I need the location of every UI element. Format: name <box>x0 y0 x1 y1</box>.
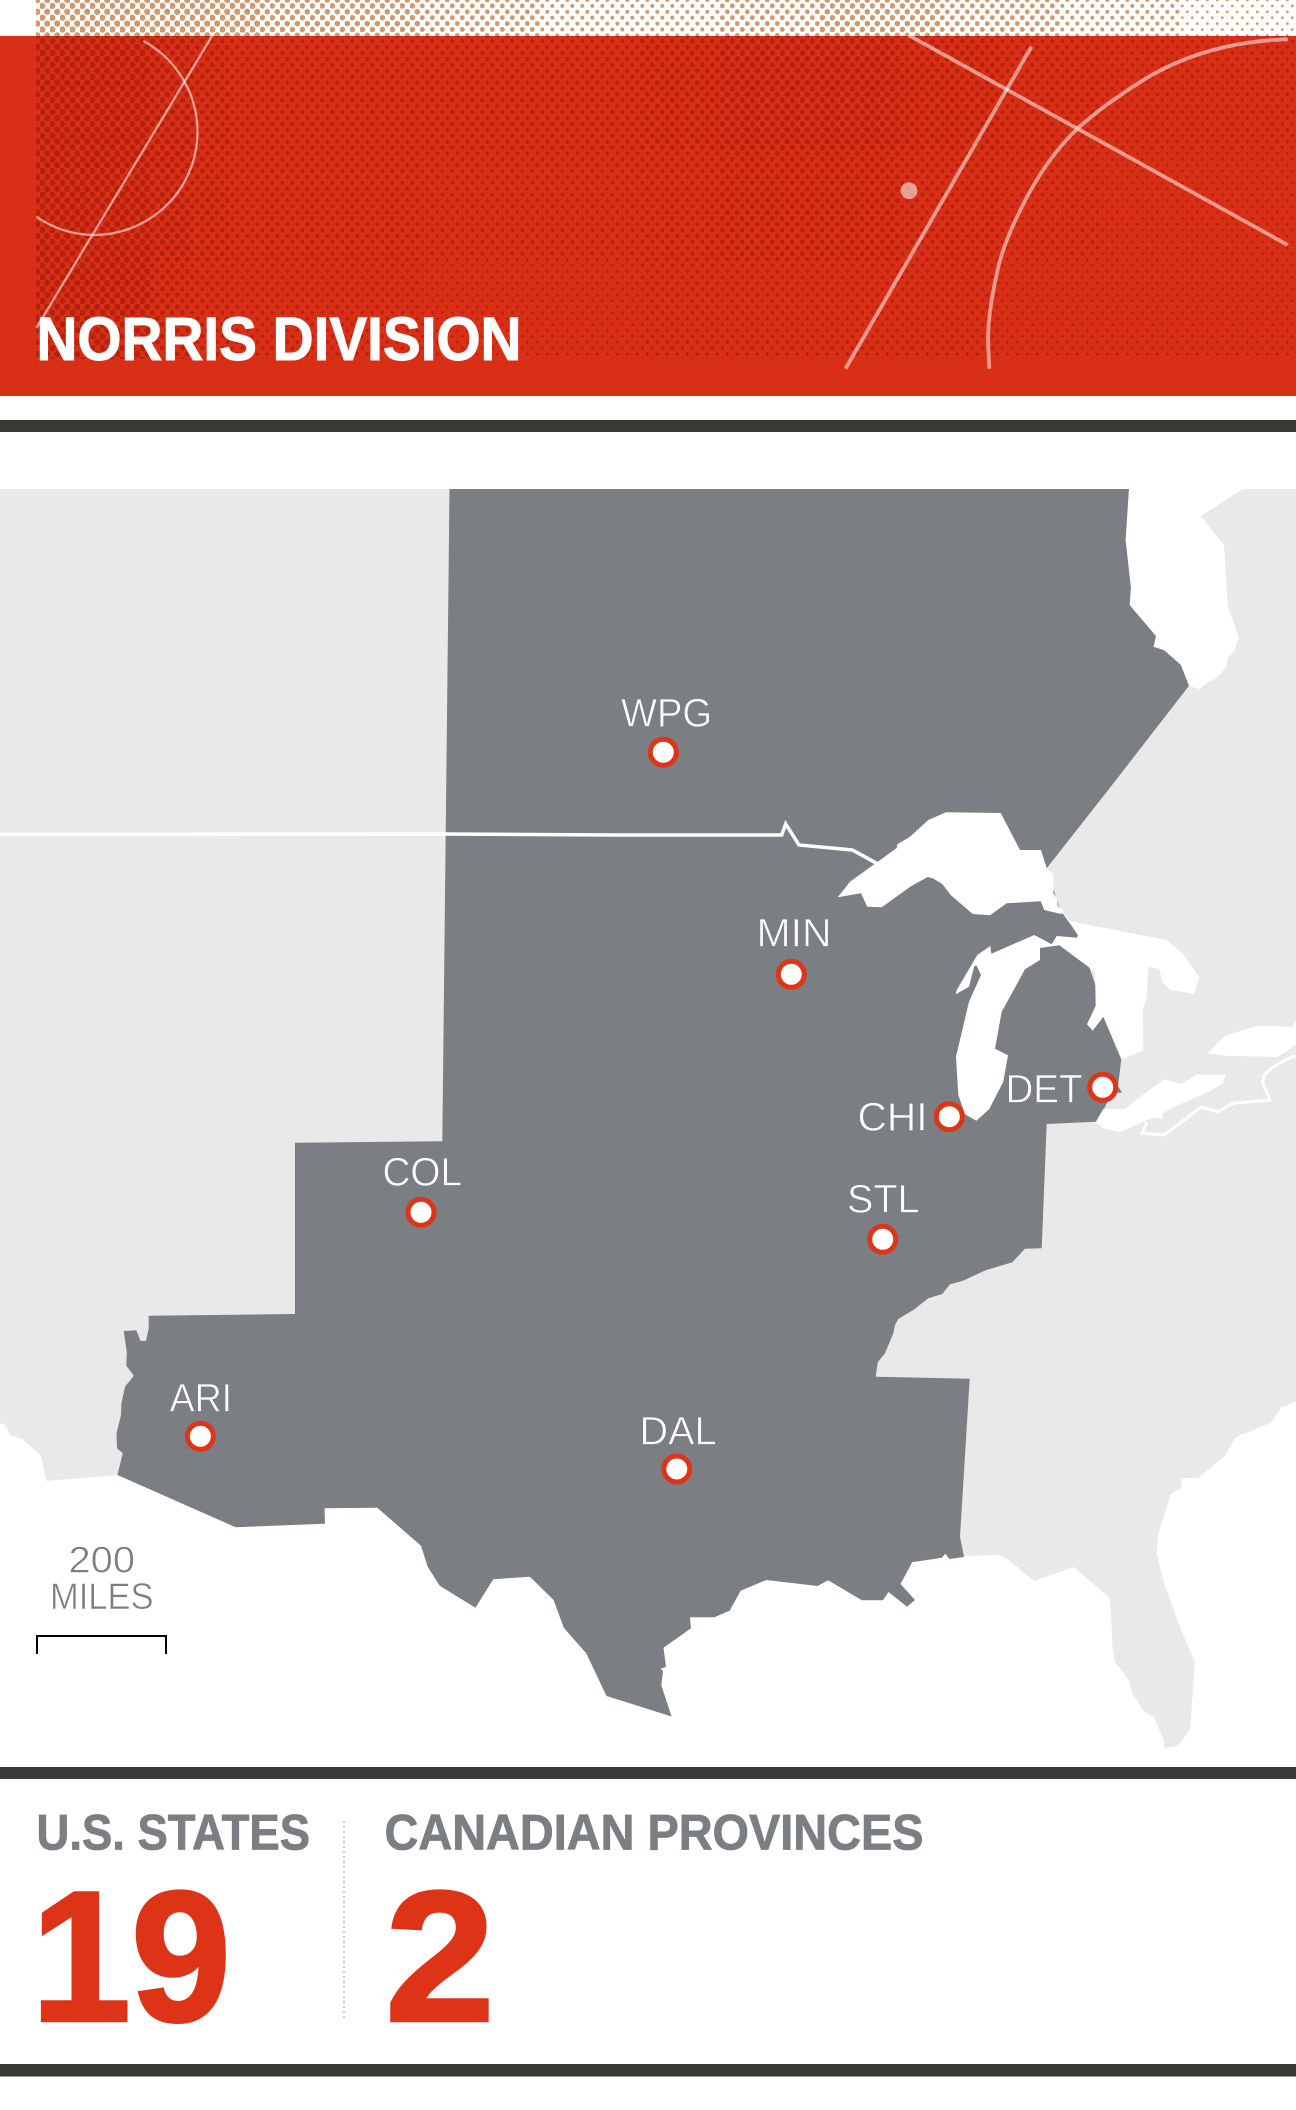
red banner background <box>0 36 1296 396</box>
team: Colorado: COL <box>382 1151 462 1195</box>
water: Lake Erie <box>1096 1075 1226 1132</box>
team: Colorado <box>382 1151 462 1225</box>
panel: stats <box>31 1804 924 2061</box>
scale bar <box>37 1540 166 1654</box>
bottom rule <box>0 2064 1296 2076</box>
stat: Canadian provinces: 2 <box>385 1854 495 2061</box>
region: Norris Division territory <box>116 489 1189 1716</box>
top rule <box>0 420 1296 432</box>
team: Dallas <box>640 1410 716 1482</box>
scale bar: 200 <box>68 1540 135 1581</box>
scale bar: MILES <box>50 1576 154 1617</box>
rule above stats <box>0 1767 1296 1779</box>
stat: U.S. states: U.S. STATES <box>36 1804 310 1860</box>
team: Arizona: ARI <box>170 1377 232 1421</box>
team: St. Louis <box>847 1177 920 1252</box>
water: Lake Ontario <box>1207 1020 1296 1057</box>
title: NORRIS DIVISION <box>36 305 522 373</box>
stat: U.S. states: 19 <box>31 1854 231 2061</box>
halftone texture <box>36 36 1296 359</box>
panel: header banner <box>0 0 1296 396</box>
team: Minnesota: MIN <box>756 912 832 956</box>
team: Arizona <box>170 1377 232 1449</box>
court lines left <box>36 36 212 328</box>
border: New York state line <box>1142 1057 1296 1135</box>
team: Chicago <box>858 1096 962 1140</box>
water: Hudson Bay <box>1126 489 1243 689</box>
halftone strip above banner <box>36 0 1296 36</box>
stat: U.S. states <box>31 1804 310 2061</box>
water: Lakes Michigan and Huron <box>956 913 1199 1121</box>
stat: Canadian provinces: CANADIAN PROVINCES <box>384 1804 924 1860</box>
divider <box>343 1821 345 2019</box>
team: Winnipeg: WPG <box>621 692 712 736</box>
land: surrounding regions <box>0 489 1296 1748</box>
team: Detroit: DET <box>1006 1067 1082 1111</box>
team: Dallas: DAL <box>640 1410 716 1454</box>
team: Minnesota <box>756 912 832 987</box>
water: Lake Superior <box>838 812 1064 915</box>
team: St. Louis: STL <box>847 1177 920 1221</box>
panel: map <box>0 489 1296 1748</box>
border: US-Canada <box>0 824 877 863</box>
team: Winnipeg <box>621 692 712 765</box>
team: Chicago: CHI <box>858 1096 928 1140</box>
court dot <box>901 182 917 199</box>
court lines right <box>846 35 1288 369</box>
stat: Canadian provinces <box>384 1804 924 2061</box>
